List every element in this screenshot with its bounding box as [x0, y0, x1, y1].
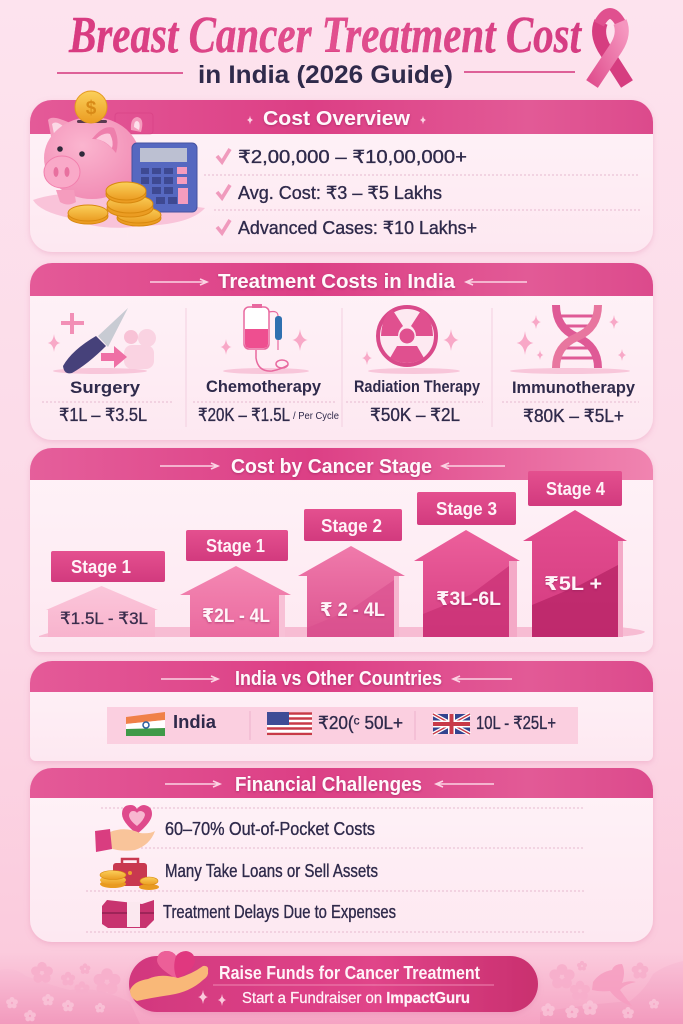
challenge: delays — [102, 900, 396, 928]
stage label: Stage 1 — [71, 557, 131, 577]
value: ₹3L-6L — [436, 589, 501, 610]
icon: heart in hand — [130, 951, 208, 1001]
stage label — [417, 492, 516, 525]
price: ₹1L – ₹3.5L — [59, 405, 147, 425]
icon: piggy bank, coins and calculator: $ — [86, 98, 97, 119]
challenge: out-of-pocket — [95, 805, 375, 852]
name: Chemotherapy — [206, 377, 322, 396]
overview rows: Advanced Cases: ₹10 Lakhs+ — [238, 218, 477, 238]
uk flag — [433, 714, 470, 734]
column: immunotherapy — [510, 305, 636, 426]
overview rows: ₹2,00,000 – ₹10,00,000+ — [238, 147, 467, 167]
call to action banner — [129, 951, 538, 1012]
name: Surgery — [70, 378, 141, 397]
heading arrows — [150, 279, 527, 285]
overview rows: Avg. Cost: ₹3 – ₹5 Lakhs — [238, 183, 442, 203]
stage 2 bar — [180, 530, 291, 637]
per cycle note: / Per Cycle — [293, 411, 339, 422]
subtitle: in India (2026 Guide) — [198, 61, 453, 89]
stage label: Stage 2 — [321, 516, 382, 536]
column: radiation therapy — [354, 307, 480, 425]
heading: Cost Overview — [263, 108, 410, 130]
panel: financial challenges — [30, 768, 653, 942]
heading: Treatment Costs in India — [218, 271, 456, 293]
heading: Financial Challenges — [235, 774, 422, 796]
overview rows — [204, 147, 640, 238]
header band — [30, 768, 653, 798]
price: ₹50K – ₹2L — [370, 405, 460, 425]
name: Radiation Therapy — [354, 377, 480, 396]
stage 3 bar — [298, 509, 405, 637]
value: ₹1.5L - ₹3L — [60, 609, 148, 628]
stage label — [528, 471, 622, 506]
icon: pink ribbon — [592, 14, 627, 84]
icon: piggy bank, coins and calculator — [33, 91, 205, 228]
heading sparkles — [247, 116, 426, 124]
stage label: Stage 4 — [546, 479, 605, 499]
icon: scalpel — [48, 308, 156, 374]
icon: heart in hand — [95, 805, 155, 852]
stage 1 bar — [46, 551, 165, 637]
value: ₹5L + — [544, 574, 602, 595]
india flag — [126, 712, 165, 736]
icon: IV bag — [220, 304, 309, 374]
usa value: ₹20(ᶜ 50L+ — [318, 713, 403, 733]
comparison strip — [107, 707, 578, 744]
cta subheading: Start a Fundraiser on ImpactGuru — [242, 990, 470, 1007]
text: Many Take Loans or Sell Assets — [165, 861, 378, 881]
usa flag — [267, 712, 312, 736]
floral footer background: left — [0, 962, 140, 1024]
stage label: Stage 1 — [206, 536, 265, 556]
heading arrows — [160, 463, 505, 469]
stage 4 bar — [414, 492, 520, 637]
text: 60–70% Out-of-Pocket Costs — [165, 819, 375, 839]
value: ₹2L - 4L — [202, 606, 270, 627]
title — [57, 7, 582, 89]
icon: radiation symbol — [362, 307, 460, 374]
icon: medical case — [102, 900, 154, 928]
panel: cost by stage — [30, 448, 653, 652]
header band — [30, 263, 653, 296]
title rules — [57, 72, 575, 73]
panel: treatment costs — [30, 263, 653, 440]
header band — [30, 448, 653, 480]
floral footer background: right — [540, 961, 683, 1024]
panel: india vs other countries — [30, 661, 653, 761]
column: chemotherapy — [198, 304, 339, 425]
value: ₹ 2 - 4L — [320, 600, 385, 621]
uk value: 10L - ₹25L+ — [476, 713, 556, 733]
header band — [30, 100, 653, 134]
cta sparkles — [198, 990, 226, 1006]
india label: India — [173, 712, 217, 732]
heading: India vs Other Countries — [235, 668, 442, 690]
text: Treatment Delays Due to Expenses — [163, 902, 396, 922]
heading arrows — [161, 676, 512, 682]
icon: briefcase and coins — [100, 859, 159, 890]
heading: Cost by Cancer Stage — [231, 456, 432, 478]
icon: DNA helix — [510, 305, 630, 374]
panel: cost overview — [30, 100, 653, 252]
price: ₹20K – ₹1.5L — [198, 405, 290, 425]
heading arrows — [165, 781, 494, 787]
stage 5 bar — [523, 471, 627, 637]
cta heading: Raise Funds for Cancer Treatment — [219, 963, 480, 983]
challenge: loans — [100, 859, 378, 890]
column: surgery — [48, 308, 156, 425]
header band — [30, 661, 653, 692]
ground shadow — [39, 627, 645, 637]
price: ₹80K – ₹5L+ — [523, 406, 624, 426]
name: Immunotherapy — [512, 378, 636, 397]
stage label: Stage 3 — [436, 499, 497, 519]
faint tag outline in header — [115, 113, 153, 134]
